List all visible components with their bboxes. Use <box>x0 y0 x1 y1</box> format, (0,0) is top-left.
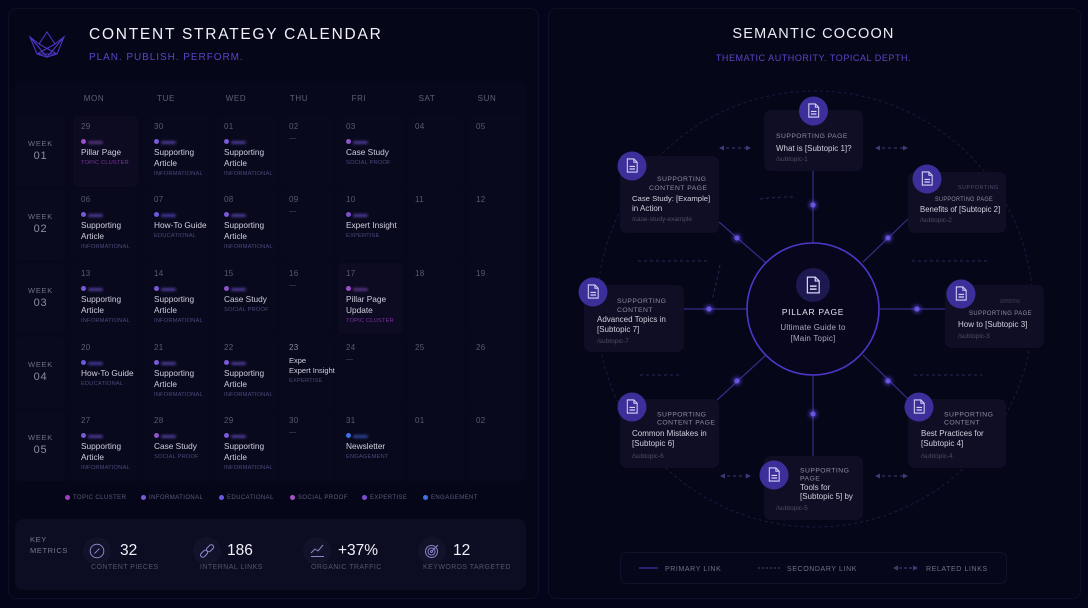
week 05 row: Article <box>81 452 104 462</box>
card: best practices subtopic 4 <box>904 392 1006 468</box>
card: benefits of subtopic 2: SUPPORTING <box>958 185 999 191</box>
card: what is subtopic 1 <box>764 96 863 171</box>
metric: organic traffic <box>304 538 382 571</box>
card: advanced topics subtopic 7: [Subtopic 7] <box>597 325 639 334</box>
title: content strategy calendar: CONTENT STRATEGY CALENDAR <box>89 26 383 43</box>
week 03 row: 18 <box>415 269 424 278</box>
week 03 row: TOPIC CLUSTER <box>346 318 394 324</box>
metric: internal links <box>194 538 263 571</box>
week 05 row: 30 <box>289 416 298 425</box>
week 02 row: EXPERTISE <box>346 233 380 239</box>
week 03 row: INFORMATIONAL <box>154 318 203 324</box>
key metrics label: METRICS <box>30 546 68 555</box>
card: best practices subtopic 4: SUPPORTING <box>944 412 993 418</box>
week 02 row: How-To Guide <box>154 220 207 230</box>
week 02 row: Supporting <box>224 220 264 230</box>
metric: keywords targeted: KEYWORDS TARGETED <box>423 564 511 571</box>
week 03 row: 14 <box>154 269 164 278</box>
calendar legend <box>65 494 478 501</box>
week 01 row: 05 <box>476 122 486 131</box>
link type legend: SECONDARY LINK <box>787 566 857 573</box>
week 03 row: WEEK <box>28 286 53 295</box>
week 01 row: 29 <box>81 122 90 131</box>
week 05 row: 27 <box>81 416 90 425</box>
card: what is subtopic 1: SUPPORTING PAGE <box>776 133 848 140</box>
key metrics label <box>30 535 68 555</box>
week 04 row: 26 <box>476 343 486 352</box>
week 02 row: 12 <box>476 195 486 204</box>
week 02 row: 02 <box>34 223 47 235</box>
week 02 row: Article <box>224 231 247 241</box>
card: case study example <box>618 152 719 233</box>
calendar weekday header: SAT <box>419 94 435 103</box>
primary link lines <box>684 171 945 456</box>
calendar weekday header: TUE <box>157 94 175 103</box>
card: advanced topics subtopic 7: /subtopic-7 <box>597 338 629 345</box>
week 01 row: Case Study <box>346 147 389 157</box>
calendar legend: SOCIAL PROOF <box>298 495 348 501</box>
week 04 row: Expert Insight <box>289 366 335 375</box>
card: benefits of subtopic 2 <box>908 164 1006 233</box>
week 05 row: Newsletter <box>346 441 385 451</box>
metric: content pieces: CONTENT PIECES <box>91 564 159 571</box>
card: advanced topics subtopic 7: Advanced Topics in <box>597 315 666 324</box>
week 04 row <box>28 343 486 398</box>
week 04 row: 23 <box>289 343 298 352</box>
week 03 row <box>28 269 486 324</box>
week 02 row <box>28 195 486 250</box>
metric: organic traffic: ORGANIC TRAFFIC <box>311 564 382 571</box>
week 01 row: Supporting <box>224 147 264 157</box>
week 02 row: EDUCATIONAL <box>154 233 196 239</box>
card: advanced topics subtopic 7: CONTENT <box>617 307 653 314</box>
related link arrows <box>638 148 988 476</box>
week 04 row: Article <box>154 379 177 389</box>
week 02 row: INFORMATIONAL <box>224 244 273 250</box>
week 05 row: 31 <box>346 416 356 425</box>
week 03 row: Article <box>81 305 104 315</box>
week 04 row: WEEK <box>28 360 53 369</box>
week 01 row: INFORMATIONAL <box>154 171 203 177</box>
week 01 row: 02 <box>289 122 298 131</box>
week 03 row: Supporting <box>154 294 194 304</box>
week 03 row: Update <box>346 305 373 315</box>
card: case study example: in Action <box>632 204 662 213</box>
icon: crown logo <box>28 31 66 58</box>
card: case study example: Case Study: [Example] <box>632 194 710 203</box>
week 03 row: Case Study <box>224 294 267 304</box>
metric: content pieces <box>84 538 159 571</box>
week 04 row: EDUCATIONAL <box>81 381 123 387</box>
card: best practices subtopic 4: [Subtopic 4] <box>921 439 963 448</box>
week 04 row: Supporting <box>224 368 264 378</box>
week 03 row: INFORMATIONAL <box>81 318 130 324</box>
week 05 row: INFORMATIONAL <box>81 465 130 471</box>
week 04 row: INFORMATIONAL <box>154 392 203 398</box>
week 04 row: EXPERTISE <box>289 378 323 384</box>
card: tools for subtopic 5: [Subtopic 5] by <box>800 492 853 501</box>
metric: keywords targeted: 12 <box>453 542 470 559</box>
week 04 row: 25 <box>415 343 424 352</box>
subtitle: thematic authority: THEMATIC AUTHORITY. TOPICAL DEPTH. <box>716 53 911 63</box>
card: what is subtopic 1: /subtopic-1 <box>776 156 808 163</box>
week 05 row: 05 <box>34 444 47 456</box>
week 04 row: 24 <box>346 343 356 352</box>
key metrics label: KEY <box>30 535 47 544</box>
week 02 row: 08 <box>224 195 234 204</box>
week 02 row: 11 <box>415 195 424 204</box>
panel: key metrics <box>15 519 526 590</box>
week 04 row: 22 <box>224 343 234 352</box>
week 04 row: Article <box>224 379 247 389</box>
week 02 row: Article <box>81 231 104 241</box>
card: case study example: CONTENT PAGE <box>649 185 707 192</box>
card: common mistakes subtopic 6: Common Mistakes in <box>632 429 707 438</box>
panel: semantic cocoon <box>548 8 1081 599</box>
card: benefits of subtopic 2: Benefits of [Subtopic 2] <box>920 205 1000 214</box>
week 03 row: Pillar Page <box>346 294 386 304</box>
week 03 row: 17 <box>346 269 356 278</box>
card: tools for subtopic 5: /subtopic-5 <box>776 505 808 512</box>
week 01 row: 30 <box>154 122 164 131</box>
calendar legend: INFORMATIONAL <box>149 495 203 501</box>
card: benefits of subtopic 2: SUPPORTING PAGE <box>935 196 993 203</box>
week 05 row: SOCIAL PROOF <box>154 454 199 460</box>
week 01 row: SOCIAL PROOF <box>346 160 391 166</box>
calendar legend: EXPERTISE <box>370 495 407 501</box>
card: tools for subtopic 5: SUPPORTING <box>800 468 849 474</box>
metric: internal links: INTERNAL LINKS <box>200 564 263 571</box>
calendar weekday header: MON <box>84 94 104 103</box>
week 05 row: INFORMATIONAL <box>224 465 273 471</box>
week 01 row: Pillar Page <box>81 147 121 157</box>
card: case study example: /case-study-example <box>632 216 692 223</box>
week 05 row: 01 <box>415 416 424 425</box>
card: what is subtopic 1: What is [Subtopic 1]? <box>776 144 852 153</box>
week 01 row: Article <box>154 158 177 168</box>
card: advanced topics subtopic 7: SUPPORTING <box>617 298 666 305</box>
title: semantic cocoon: SEMANTIC COCOON <box>732 26 895 42</box>
calendar legend: ENGAGEMENT <box>431 495 478 501</box>
card: common mistakes subtopic 6: /subtopic-6 <box>632 453 664 460</box>
week 02 row: 10 <box>346 195 356 204</box>
week 03 row: 16 <box>289 269 298 278</box>
card: common mistakes subtopic 6: CONTENT PAGE <box>657 420 715 426</box>
week 01 row: TOPIC CLUSTER <box>81 160 129 166</box>
card: benefits of subtopic 2: /subtopic-2 <box>920 217 952 224</box>
week 02 row: 06 <box>81 195 90 204</box>
metric: organic traffic: +37% <box>338 542 378 559</box>
card: tools for subtopic 5: Tools for <box>800 483 831 492</box>
card: case study example: SUPPORTING <box>657 176 706 183</box>
week 05 row: Supporting <box>81 441 121 451</box>
week 04 row: 20 <box>81 343 90 352</box>
panel: content strategy calendar <box>8 8 539 599</box>
week 05 row: WEEK <box>28 433 53 442</box>
card: best practices subtopic 4: CONTENT <box>944 420 980 426</box>
week 01 row <box>28 122 486 177</box>
week 03 row: 19 <box>476 269 486 278</box>
calendar weekday header: SUN <box>478 94 496 103</box>
week 02 row: WEEK <box>28 212 53 221</box>
card: how to subtopic 3: SUPPORTING <box>1000 299 1020 305</box>
calendar weekday header: WED <box>226 94 246 103</box>
week 02 row: Supporting <box>81 220 121 230</box>
week 01 row: Article <box>224 158 247 168</box>
week 01 row: 03 <box>346 122 356 131</box>
week 05 row: 02 <box>476 416 486 425</box>
week 05 row: 28 <box>154 416 164 425</box>
link type legend <box>620 552 1006 584</box>
week 03 row: 03 <box>34 297 47 309</box>
pillar page node: PILLAR PAGE <box>782 307 844 317</box>
week 05 row: Case Study <box>154 441 197 451</box>
week 04 row: Supporting <box>154 368 194 378</box>
calendar background <box>15 82 526 481</box>
week 05 row <box>28 416 486 471</box>
week 03 row: Article <box>154 305 177 315</box>
week 01 row: 01 <box>224 122 234 131</box>
week 03 row: SOCIAL PROOF <box>224 307 269 313</box>
metric: content pieces: 32 <box>120 542 137 559</box>
week 02 row: INFORMATIONAL <box>81 244 130 250</box>
pillar page node: [Main Topic] <box>791 334 835 343</box>
calendar legend: EDUCATIONAL <box>227 495 274 501</box>
card: how to subtopic 3: SUPPORTING PAGE <box>969 310 1032 317</box>
outer dashed orbit <box>597 91 1033 527</box>
calendar weekday header: THU <box>290 94 308 103</box>
card: common mistakes subtopic 6: SUPPORTING <box>657 412 706 418</box>
card: how to subtopic 3 <box>945 280 1044 348</box>
metric: internal links: 186 <box>227 542 253 559</box>
week 01 row: 04 <box>415 122 424 131</box>
card: advanced topics subtopic 7 <box>578 278 684 352</box>
week 04 row: Expe <box>289 356 306 365</box>
week 04 row: How-To Guide <box>81 368 134 378</box>
link type legend: PRIMARY LINK <box>665 566 721 573</box>
week 04 row: 21 <box>154 343 164 352</box>
week 01 row: Supporting <box>154 147 194 157</box>
card: best practices subtopic 4: Best Practices for <box>921 429 984 438</box>
week 01 row: WEEK <box>28 139 53 148</box>
calendar weekday header <box>84 94 496 103</box>
card: how to subtopic 3: /subtopic-3 <box>958 333 990 340</box>
week 02 row: Expert Insight <box>346 220 397 230</box>
card: common mistakes subtopic 6 <box>618 392 719 468</box>
week 02 row: 09 <box>289 195 298 204</box>
calendar weekday header: FRI <box>352 94 366 103</box>
week 03 row: 13 <box>81 269 90 278</box>
week 05 row: Article <box>224 452 247 462</box>
week 03 row: 15 <box>224 269 234 278</box>
card: tools for subtopic 5 <box>760 456 863 520</box>
week 03 row: Supporting <box>81 294 121 304</box>
card: tools for subtopic 5: PAGE <box>800 476 820 482</box>
week 04 row: INFORMATIONAL <box>224 392 273 398</box>
week 05 row: ENGAGEMENT <box>346 454 388 460</box>
card: how to subtopic 3: How to [Subtopic 3] <box>958 320 1027 329</box>
card: best practices subtopic 4: /subtopic-4 <box>921 453 953 460</box>
link type legend: RELATED LINKS <box>926 566 988 573</box>
pillar page node: Ultimate Guide to <box>780 323 846 332</box>
week 01 row: INFORMATIONAL <box>224 171 273 177</box>
link nodes <box>706 202 920 418</box>
week 02 row: 07 <box>154 195 164 204</box>
week 05 row: Supporting <box>224 441 264 451</box>
week 05 row: 29 <box>224 416 234 425</box>
metric: keywords targeted <box>418 538 511 571</box>
week 04 row: 04 <box>34 371 47 383</box>
calendar legend: TOPIC CLUSTER <box>73 495 126 501</box>
pillar page node <box>747 243 879 375</box>
subtitle: plan publish perform: PLAN. PUBLISH. PERFORM. <box>89 52 244 63</box>
card: common mistakes subtopic 6: [Subtopic 6] <box>632 439 674 448</box>
week 01 row: 01 <box>34 150 47 162</box>
